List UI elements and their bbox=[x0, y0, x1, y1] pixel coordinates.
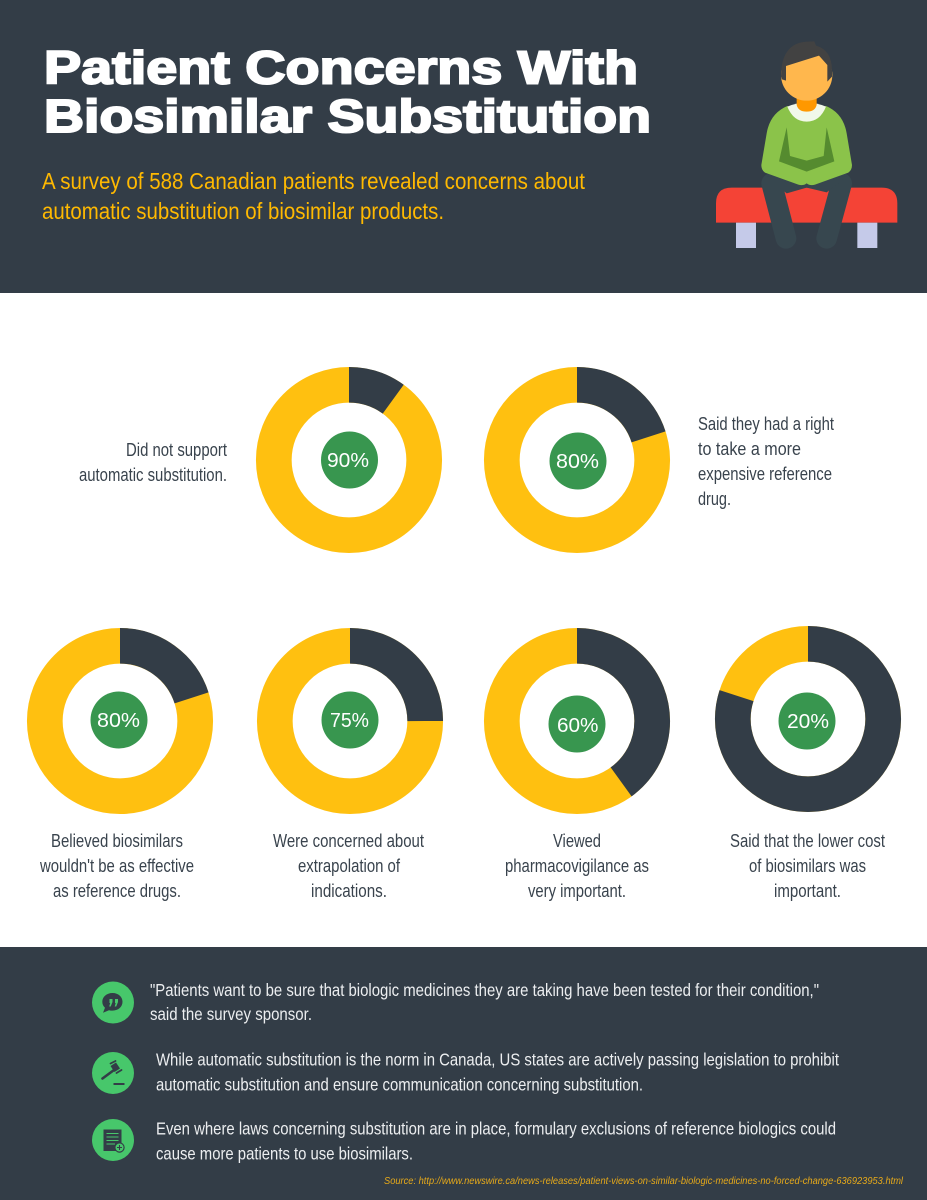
text: legislation: automatic substitution and ensure communication concerning substitution. bbox=[156, 1074, 643, 1094]
donut chart: 80% effectiveness bbox=[45, 646, 195, 796]
text: survey sponsor quote: said the survey sponsor. bbox=[150, 1004, 312, 1024]
label: extrapolation: indications. bbox=[311, 881, 387, 901]
donut chart: 80% effectiveness: 80% bbox=[97, 710, 140, 732]
label: right to more expensive drug: Said they had a right bbox=[698, 414, 834, 434]
donut chart: 80% reference drug right: 80% bbox=[556, 451, 599, 473]
label: right to more expensive drug: drug. bbox=[698, 489, 731, 509]
donut chart: 60% bbox=[502, 646, 652, 796]
icon: document with plus bbox=[92, 1119, 134, 1161]
label: did not support: Did not support bbox=[126, 440, 227, 460]
donut chart: 60%: 60% bbox=[557, 715, 599, 737]
label: extrapolation bbox=[273, 831, 424, 901]
label: lower cost: Said that the lower cost bbox=[730, 831, 885, 851]
text: survey sponsor quote: "Patients want to be sure that biologic medicines they are taking have been tested for their condition," bbox=[150, 980, 819, 1000]
label: pharmacovigilance bbox=[505, 831, 649, 901]
icon: speech bubble bbox=[92, 982, 134, 1024]
label: effectiveness bbox=[39, 831, 194, 901]
donut chart: 80% reference drug right bbox=[502, 385, 652, 535]
label: lower cost bbox=[730, 831, 885, 901]
text: survey sponsor quote bbox=[150, 980, 819, 1024]
label: effectiveness: wouldn't be as effective bbox=[39, 856, 194, 876]
donut chart: 90%: 90% bbox=[327, 450, 369, 472]
donut chart: 20%: 20% bbox=[787, 711, 829, 733]
text: formulary exclusions bbox=[156, 1118, 836, 1164]
donut chart: 75% bbox=[275, 646, 425, 796]
label: extrapolation: Were concerned about bbox=[273, 831, 424, 851]
title bbox=[44, 42, 651, 142]
donut chart: 90% bbox=[274, 385, 424, 535]
title: Biosimilar Substitution bbox=[44, 90, 651, 142]
panel: header bbox=[0, 0, 927, 293]
text: legislation bbox=[156, 1050, 839, 1094]
label: did not support bbox=[79, 440, 227, 485]
label: pharmacovigilance: Viewed bbox=[553, 831, 601, 851]
donut chart: 75%: 75% bbox=[330, 710, 369, 732]
text: formulary exclusions: cause more patients to use biosimilars. bbox=[156, 1144, 413, 1164]
label: lower cost: of biosimilars was bbox=[749, 856, 866, 876]
subtitle bbox=[42, 168, 585, 224]
label: pharmacovigilance: pharmacovigilance as bbox=[505, 856, 649, 876]
label: did not support: automatic substitution. bbox=[79, 465, 227, 485]
label: effectiveness: as reference drugs. bbox=[53, 881, 181, 901]
title: Patient Concerns With bbox=[44, 42, 638, 94]
label: effectiveness: Believed biosimilars bbox=[51, 831, 183, 851]
icon: person sitting on bench bbox=[716, 41, 897, 248]
label: right to more expensive drug: to take a more bbox=[698, 439, 801, 459]
label: pharmacovigilance: very important. bbox=[528, 881, 626, 901]
donut chart: 20% bbox=[733, 644, 883, 794]
subtitle: A survey of 588 Canadian patients revealed concerns about bbox=[42, 168, 585, 194]
panel: footer bbox=[0, 947, 927, 1200]
icon: gavel bbox=[92, 1052, 134, 1094]
subtitle: automatic substitution of biosimilar products. bbox=[42, 198, 444, 224]
label: extrapolation: extrapolation of bbox=[298, 856, 401, 876]
label: lower cost: important. bbox=[774, 881, 841, 901]
label: right to more expensive drug bbox=[698, 414, 834, 509]
label: right to more expensive drug: expensive reference bbox=[698, 464, 832, 484]
